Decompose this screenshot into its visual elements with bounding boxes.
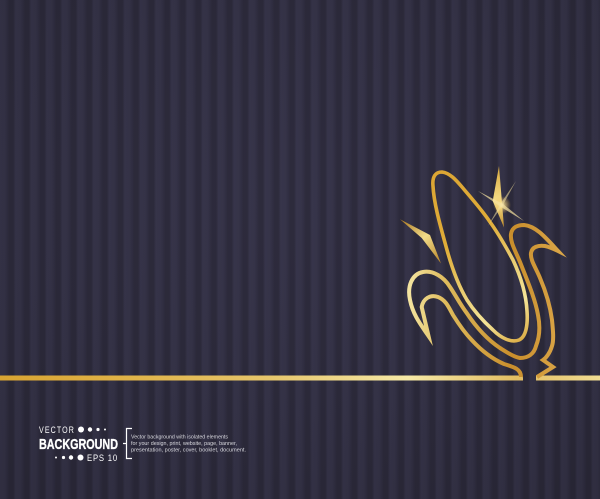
label: background: BACKGROUND — [39, 436, 118, 453]
label: vector: VECTOR — [39, 425, 75, 436]
label: eps 10: EPS 10 — [87, 453, 118, 464]
description text: Vector background with isolated elements — [131, 434, 228, 440]
icon: top leaf — [493, 166, 504, 228]
description text — [131, 434, 246, 454]
icon: corn — [409, 172, 558, 377]
bracket — [123, 428, 132, 458]
sparkle — [478, 181, 524, 226]
decorative dots bottom — [55, 454, 84, 460]
description text: for your design, print, website, page, banner, — [131, 441, 237, 447]
icon: left leaf — [400, 219, 441, 264]
gold horizontal line — [0, 376, 600, 380]
logo block: vector background eps 10 — [39, 425, 246, 464]
description text: presentation, poster, cover, booklet, document. — [131, 448, 246, 454]
outer husk — [409, 225, 558, 377]
decorative dots top — [78, 426, 106, 432]
corn ear outline — [433, 172, 527, 341]
